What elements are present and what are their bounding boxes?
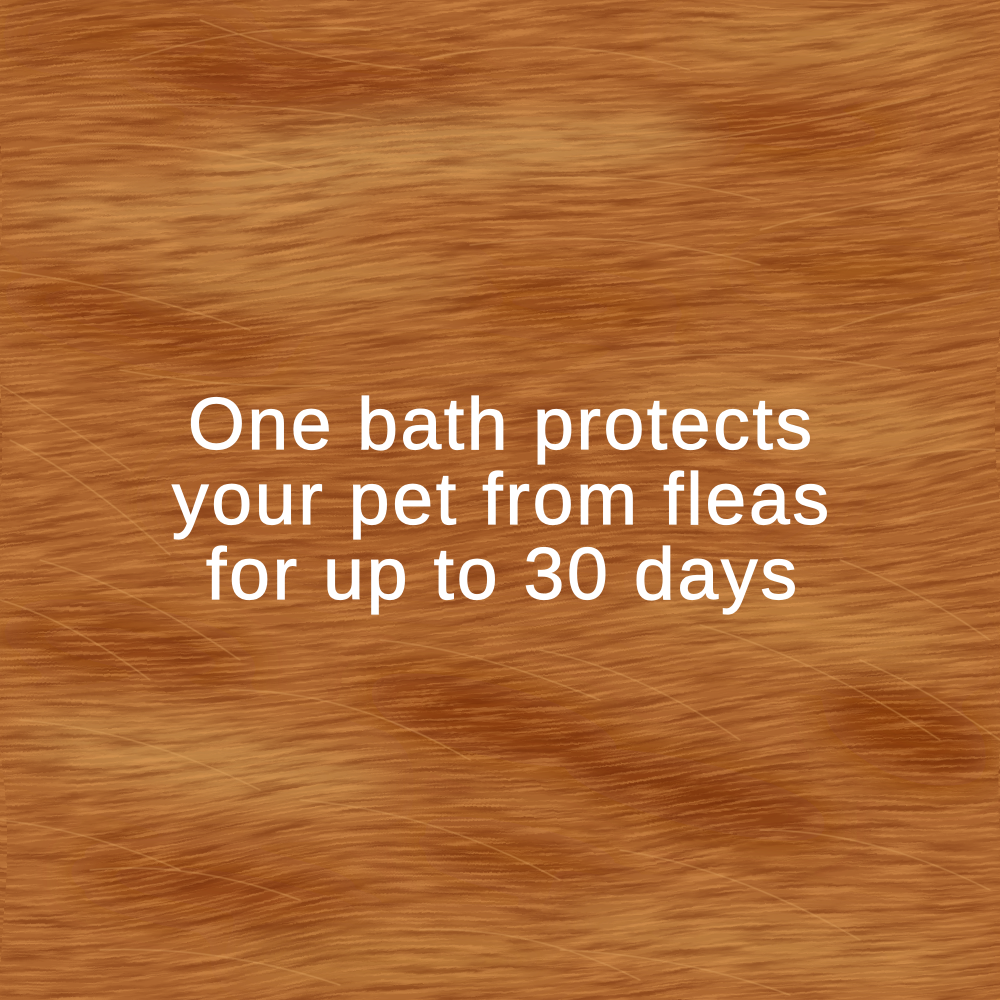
headline line 3: for up to 30 days <box>206 534 797 615</box>
headline line 2: your pet from fleas <box>172 459 829 540</box>
headline line 1: One bath protects <box>188 384 812 465</box>
headline <box>172 384 829 615</box>
